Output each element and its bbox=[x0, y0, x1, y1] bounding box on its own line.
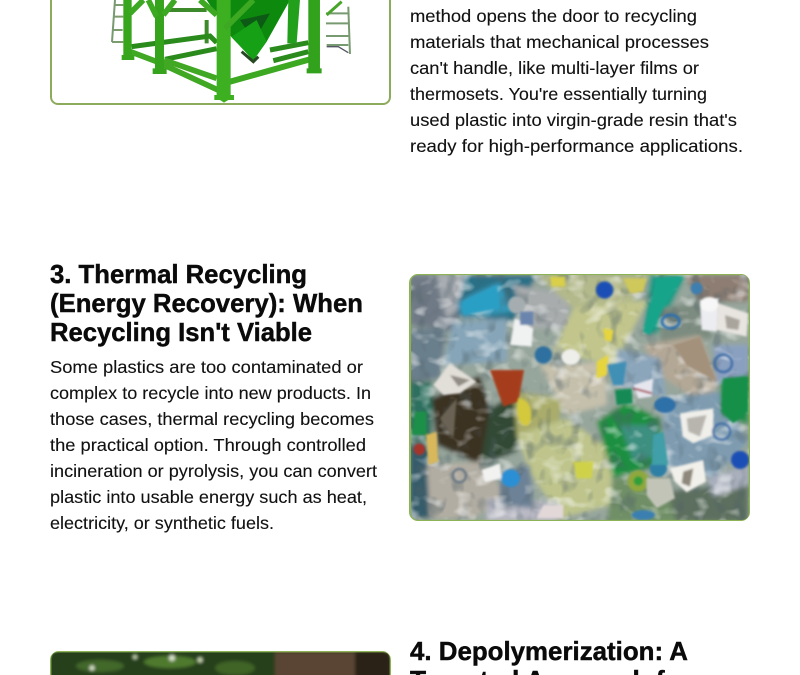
heading: section 3: Recycling Isn't Viable bbox=[50, 317, 312, 347]
image panel: green recycling machine bbox=[51, 0, 390, 104]
text block: section 3 paragraph: the practical option. Through controlled bbox=[50, 435, 366, 455]
heading: section 3: 3. Thermal Recycling bbox=[50, 259, 307, 289]
text block: end of section 2 paragraph: ready for high-performance applications. bbox=[410, 136, 743, 156]
image panel: section 4 photo (cropped forest) bbox=[51, 652, 390, 675]
heading: section 3: (Energy Recovery): When bbox=[50, 288, 363, 318]
text block: section 3 paragraph: electricity, or synthetic fuels. bbox=[50, 513, 274, 533]
text block: section 3 paragraph: complex to recycle into new products. In bbox=[50, 383, 371, 403]
text block: end of section 2 paragraph: used plastic into virgin-grade resin that's bbox=[410, 110, 737, 130]
text block: section 3 paragraph: plastic into usable energy such as heat, bbox=[50, 487, 367, 507]
text block: section 3 paragraph: incineration or pyrolysis, you can convert bbox=[50, 461, 377, 481]
text block: end of section 2 paragraph: can't handle, like multi-layer films or bbox=[410, 58, 699, 78]
text block: end of section 2 paragraph: method opens the door to recycling bbox=[410, 6, 697, 26]
photo base colour patches bbox=[410, 273, 750, 522]
icon: green steel hopper frame bbox=[112, 0, 350, 103]
text block: end of section 2 paragraph bbox=[410, 0, 743, 156]
image panel: pile of plastic waste bbox=[410, 273, 750, 522]
text block: section 3 paragraph: those cases, thermal recycling becomes bbox=[50, 409, 374, 429]
photo crinkle texture: dark bbox=[410, 273, 750, 522]
text block: section 3 paragraph: Some plastics are too contaminated or bbox=[50, 357, 363, 377]
photo objects: bottles, caps and tubs bbox=[412, 277, 749, 520]
text block: end of section 2 paragraph: materials that mechanical processes bbox=[410, 32, 709, 52]
text block: section 3 paragraph bbox=[50, 357, 377, 533]
text block: end of section 2 paragraph: thermosets. You're essentially turning bbox=[410, 84, 707, 104]
heading: section 3 bbox=[50, 259, 363, 347]
photo crinkle texture: light bbox=[410, 273, 750, 522]
heading: section 4: 4. Depolymerization: A bbox=[410, 636, 688, 666]
